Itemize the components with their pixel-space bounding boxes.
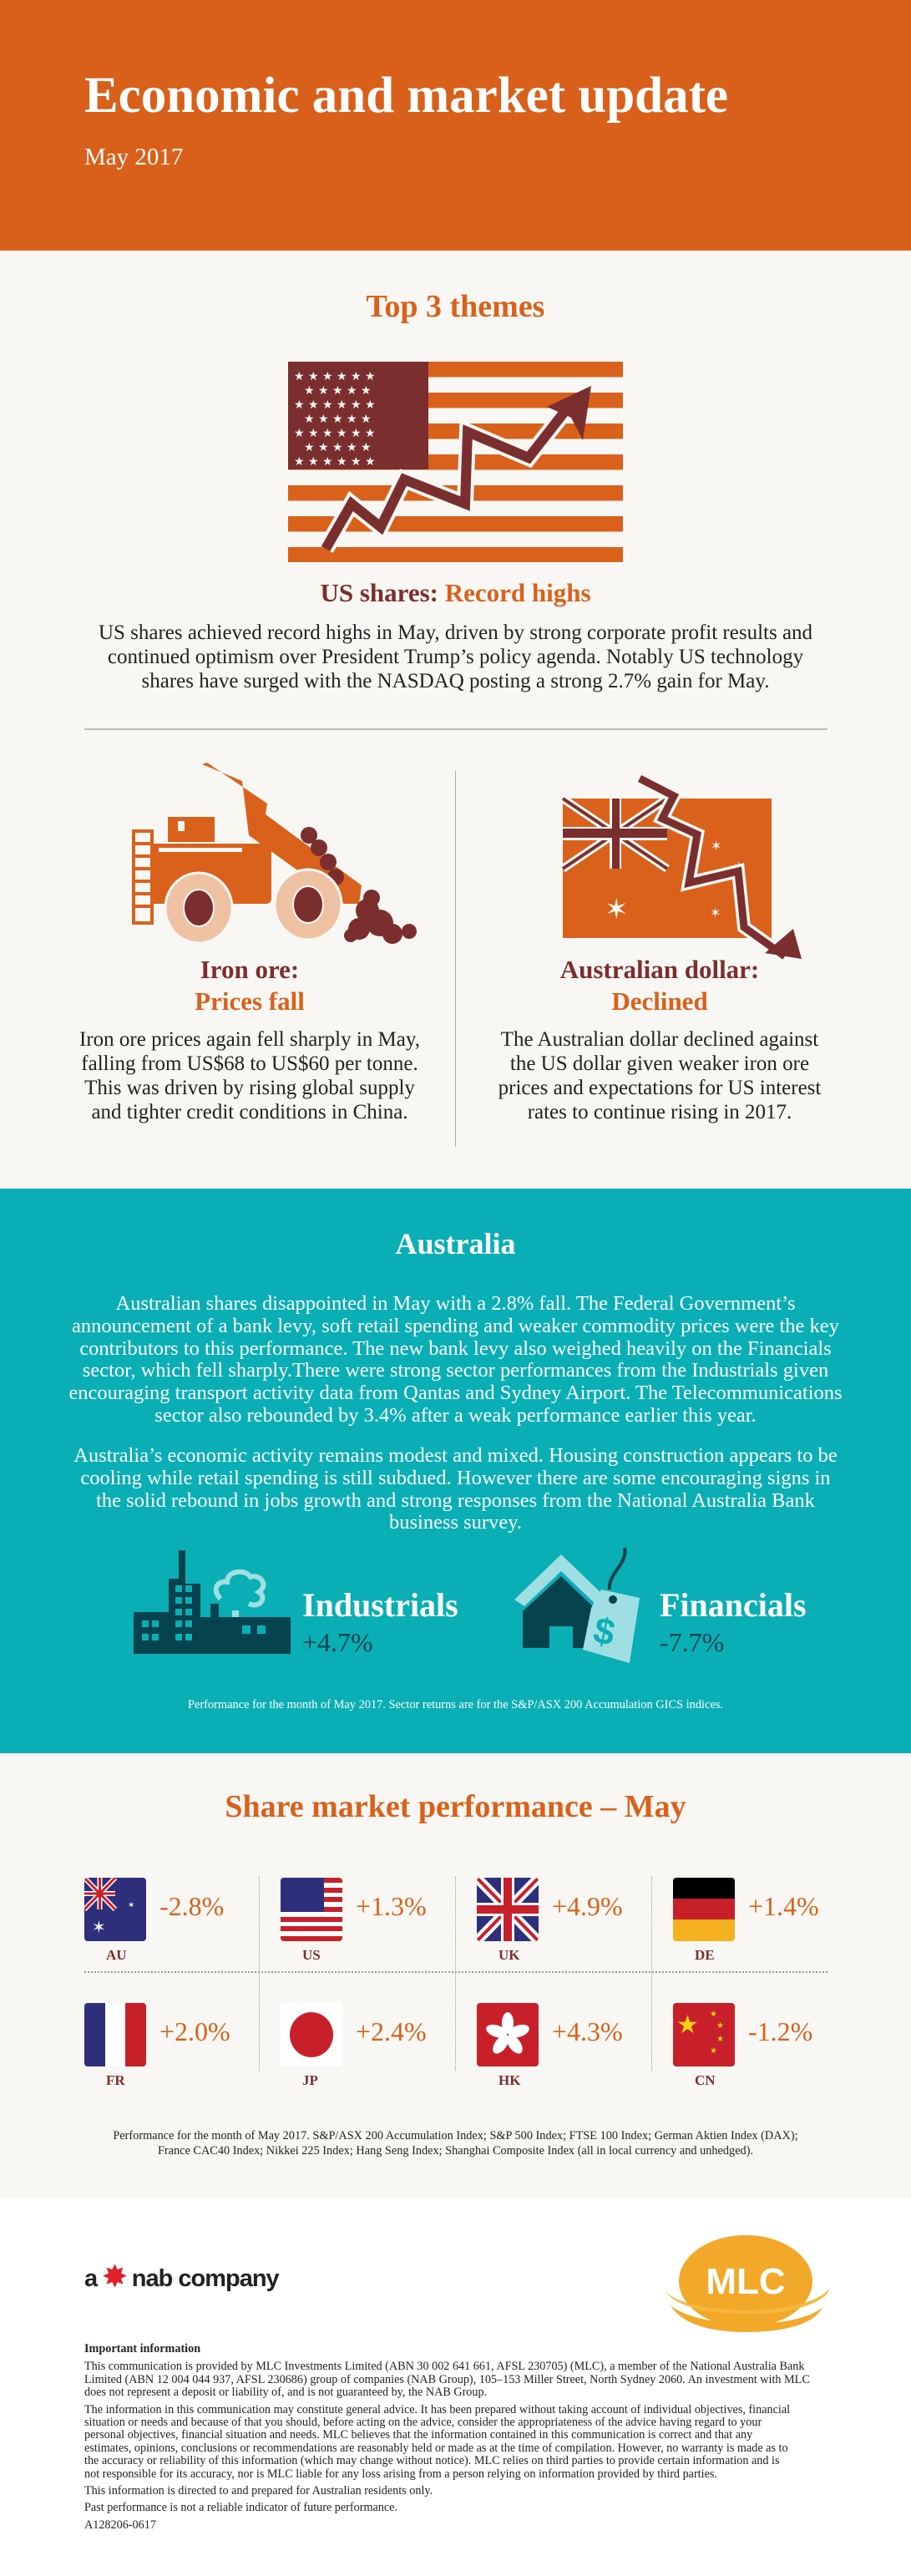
text: important information: Past performance is not a reliable indicator of future performance. (84, 2501, 397, 2514)
text: iron ore paragraph (79, 1028, 420, 1123)
text: important information: personal objectives, financial situation and needs. MLC believes that the information contained in this communication is correct and that any (84, 2428, 752, 2442)
text: Australia paragraph 1: announcement of a bank levy, soft retail spending and weaker commodity prices were the key (72, 1315, 839, 1337)
text: Australia paragraph 1: contributors to this performance. The new bank levy also weighed heavily on the Financials (79, 1337, 832, 1360)
country: DE: DE (695, 1947, 715, 1963)
text: AUD paragraph (499, 1028, 822, 1123)
heading: Australia: Australia (396, 1227, 516, 1260)
country: FR: +2.0% (159, 2016, 230, 2046)
label: Financials: Financials (660, 1586, 807, 1624)
heading: iron ore (195, 955, 305, 1016)
label: Financials (660, 1586, 807, 1657)
panel: share market performance (0, 1753, 911, 2198)
country: US: +1.3% (356, 1891, 427, 1921)
text: important information: The information in this communication may constitute general advice. It has been prepared without taking account of individual objectives, financial (84, 2403, 790, 2416)
country: AU (84, 1878, 224, 1963)
icon: Australian flag with falling arrow: ✶ (733, 859, 744, 875)
text: Australia paragraph 1 (68, 1292, 843, 1427)
country: JP: +2.4% (356, 2016, 427, 2046)
text: important information: not responsible for its accuracy, nor is MLC liable for any loss arising from a person relying on information provided by third parties. (84, 2467, 717, 2481)
text: important information: situation or needs and because of that you should, before acting on the advice, consider the appropriateness of the advice having regard to your (84, 2416, 762, 2429)
label: Industrials: Industrials (302, 1586, 458, 1624)
heading: iron ore: Iron ore: (200, 955, 299, 984)
text: important information (84, 2342, 810, 2532)
text: important information: Important information (84, 2342, 200, 2355)
icon: factory (134, 1550, 291, 1654)
icon: Australian flag with falling arrow: ✶ (605, 893, 628, 926)
country: UK: UK (499, 1947, 519, 1963)
heading: US shares: US shares: Record highs (320, 578, 591, 607)
text: US shares paragraph: shares have surged with the NASDAQ posting a strong 2.7% gain for May. (142, 670, 769, 692)
icon: US flag with rising arrow: ★ ★ ★ ★ ★ (304, 441, 372, 454)
label: Industrials: +4.7% (302, 1627, 373, 1657)
country: HK: +4.3% (552, 2016, 623, 2046)
text: iron ore paragraph: This was driven by rising global supply (84, 1077, 415, 1099)
text: important information: the accuracy or reliability of this information (which may change without notice). MLC relies on third parties to provide certain information and is (84, 2454, 779, 2467)
title: Economic and market update (84, 68, 728, 124)
country: CN: ★ (710, 2010, 717, 2019)
country: CN: ★ (710, 2046, 717, 2056)
text: important information: Limited (ABN 12 004 044 937, AFSL 230686) group of companies (NAB Group), 105–153 Miller Street, North Sydney 2060. An investment with MLC (84, 2373, 810, 2386)
country: HK (477, 2003, 623, 2088)
country: FR: FR (106, 2072, 125, 2088)
text: Australia paragraph 2 (73, 1444, 838, 1534)
country: HK: HK (499, 2072, 520, 2088)
text: Australia paragraph 1: sector also rebounded by 3.4% after a weak performance earlier this year. (154, 1404, 757, 1427)
text: AUD paragraph: rates to continue rising in 2017. (528, 1101, 792, 1123)
panel: Australia (0, 1189, 911, 1753)
country: UK (477, 1878, 623, 1963)
icon: US flag with rising arrow: ★ ★ ★ ★ ★ (304, 384, 372, 398)
text: important information: estimates, opinions, conclusions or recommendations are reasonably held or made as at the time of compilation. However, no warranty is made as to (84, 2442, 788, 2455)
logo: a nab company: a ✸ nab company (84, 2261, 279, 2293)
icon: US flag with rising arrow: ★ ★ ★ ★ ★ ★ (294, 455, 376, 469)
label: Industrials (302, 1586, 458, 1657)
text: AUD paragraph: The Australian dollar declined against (501, 1028, 818, 1051)
country: CN: CN (695, 2072, 716, 2088)
country: CN: ★ (716, 2021, 724, 2031)
text: important information: This information is directed to and prepared for Australian residents only. (84, 2484, 433, 2497)
logo: MLC (666, 2235, 829, 2332)
text: Australia paragraph 2: Australia’s economic activity remains modest and mixed. Housing construction appears to be (73, 1444, 838, 1467)
country: CN (673, 2003, 812, 2088)
icon: US flag with rising arrow (288, 362, 623, 562)
footnote: Australia: Performance for the month of May 2017. Sector returns are for the S&P/ASX 200 Accumulation GICS indices. (188, 1698, 723, 1711)
date: May 2017 (84, 144, 183, 170)
text: US shares paragraph (99, 621, 812, 692)
logo: MLC: MLC (706, 2261, 786, 2302)
country: US (281, 1878, 427, 1963)
heading: share market performance: Share market performance – May (225, 1789, 686, 1824)
country: CN: ★ (676, 2011, 699, 2040)
text: Australia paragraph 1: Australian shares disappointed in May with a 2.8% fall. The Federal Government’s (115, 1292, 795, 1315)
text: important information: This communication is provided by MLC Investments Limited (ABN 30 002 641 661, AFSL 230705) (MLC), a member of the National Australia Bank (84, 2360, 804, 2373)
country: JP: JP (302, 2072, 318, 2088)
text: US shares paragraph: continued optimism over President Trump’s policy agenda. Notably US technology (108, 646, 803, 668)
header banner (0, 0, 911, 251)
country: AU: AU (106, 1947, 127, 1963)
text: iron ore paragraph: Iron ore prices again fell sharply in May, (79, 1028, 420, 1051)
text: important information: does not represent a deposit or liability of, and is not guaranteed by, the NAB Group. (84, 2386, 487, 2399)
country: US: US (302, 1947, 321, 1963)
country: DE: +1.4% (748, 1891, 819, 1921)
heading: Australian dollar: Australian dollar: (560, 955, 759, 984)
text: Australia paragraph 1: encouraging transport activity data from Qantas and Sydney Airport. The Telecommunications (68, 1382, 843, 1404)
icon: US flag with rising arrow: ★ ★ ★ ★ ★ ★ (294, 427, 376, 440)
text: US shares paragraph: US shares achieved record highs in May, driven by strong corporate profit results and (99, 621, 812, 644)
text: iron ore paragraph: falling from US$68 to US$60 per tonne. (81, 1052, 418, 1075)
text: Australia paragraph 2: the solid rebound in jobs growth and strong responses from the National Australia Bank (96, 1489, 815, 1512)
country: AU: ✶ (128, 1901, 134, 1910)
country: AU: -2.8% (159, 1891, 224, 1921)
label: Financials: -7.7% (660, 1627, 724, 1657)
country: DE (673, 1878, 819, 1963)
cream section: top 3 themes (0, 251, 911, 1189)
icon: Australian flag with falling arrow: ✶ (710, 905, 721, 920)
text: important information: A128206-0617 (84, 2518, 156, 2532)
icon: mining truck (132, 763, 417, 944)
text: iron ore paragraph: and tighter credit conditions in China. (91, 1101, 408, 1123)
icon: Australian flag with falling arrow (561, 775, 802, 960)
icon: house with price tag (514, 1547, 640, 1663)
country: JP (281, 2003, 427, 2088)
icon: US flag with rising arrow: ★ ★ ★ ★ ★ (304, 413, 372, 426)
icon: US flag with rising arrow: ★ ★ ★ ★ ★ ★ (294, 370, 376, 383)
footnote: share markets: France CAC40 Index; Nikkei 225 Index; Hang Seng Index; Shanghai Composite Index (all in local currency and unhedged). (158, 2144, 753, 2158)
text: Australia paragraph 2: business survey. (389, 1511, 522, 1534)
icon: US flag with rising arrow: ★ ★ ★ ★ ★ ★ (294, 398, 376, 412)
footnote: share markets (113, 2129, 798, 2158)
heading: Australian dollar: Declined (611, 986, 708, 1016)
country: CN: ★ (716, 2035, 724, 2044)
icon: house with price tag: $ (590, 1610, 619, 1654)
country: UK: +4.9% (552, 1891, 623, 1921)
text: Australia paragraph 1: sector, which fell sharply.There were strong sector performances from the Industrials given (83, 1359, 828, 1382)
country: CN: -1.2% (748, 2016, 812, 2046)
footnote: share markets: Performance for the month of May 2017. S&P/ASX 200 Accumulation Index; S&P 500 Index; FTSE 100 Index; German Aktien Index (DAX); (113, 2129, 798, 2142)
country: AU: ✶ (92, 1917, 106, 1937)
icon: Australian flag with falling arrow: ✶ (711, 838, 721, 854)
heading: top 3 themes: Top 3 themes (367, 289, 544, 324)
text: AUD paragraph: the US dollar given weaker iron ore (510, 1052, 809, 1075)
heading: Australian dollar (560, 955, 759, 1016)
country: FR (84, 2003, 230, 2088)
heading: iron ore: Prices fall (195, 986, 305, 1016)
text: AUD paragraph: prices and expectations for US interest (499, 1077, 821, 1099)
text: Australia paragraph 2: cooling while retail spending is still subdued. However there are some encouraging signs in (80, 1467, 831, 1489)
